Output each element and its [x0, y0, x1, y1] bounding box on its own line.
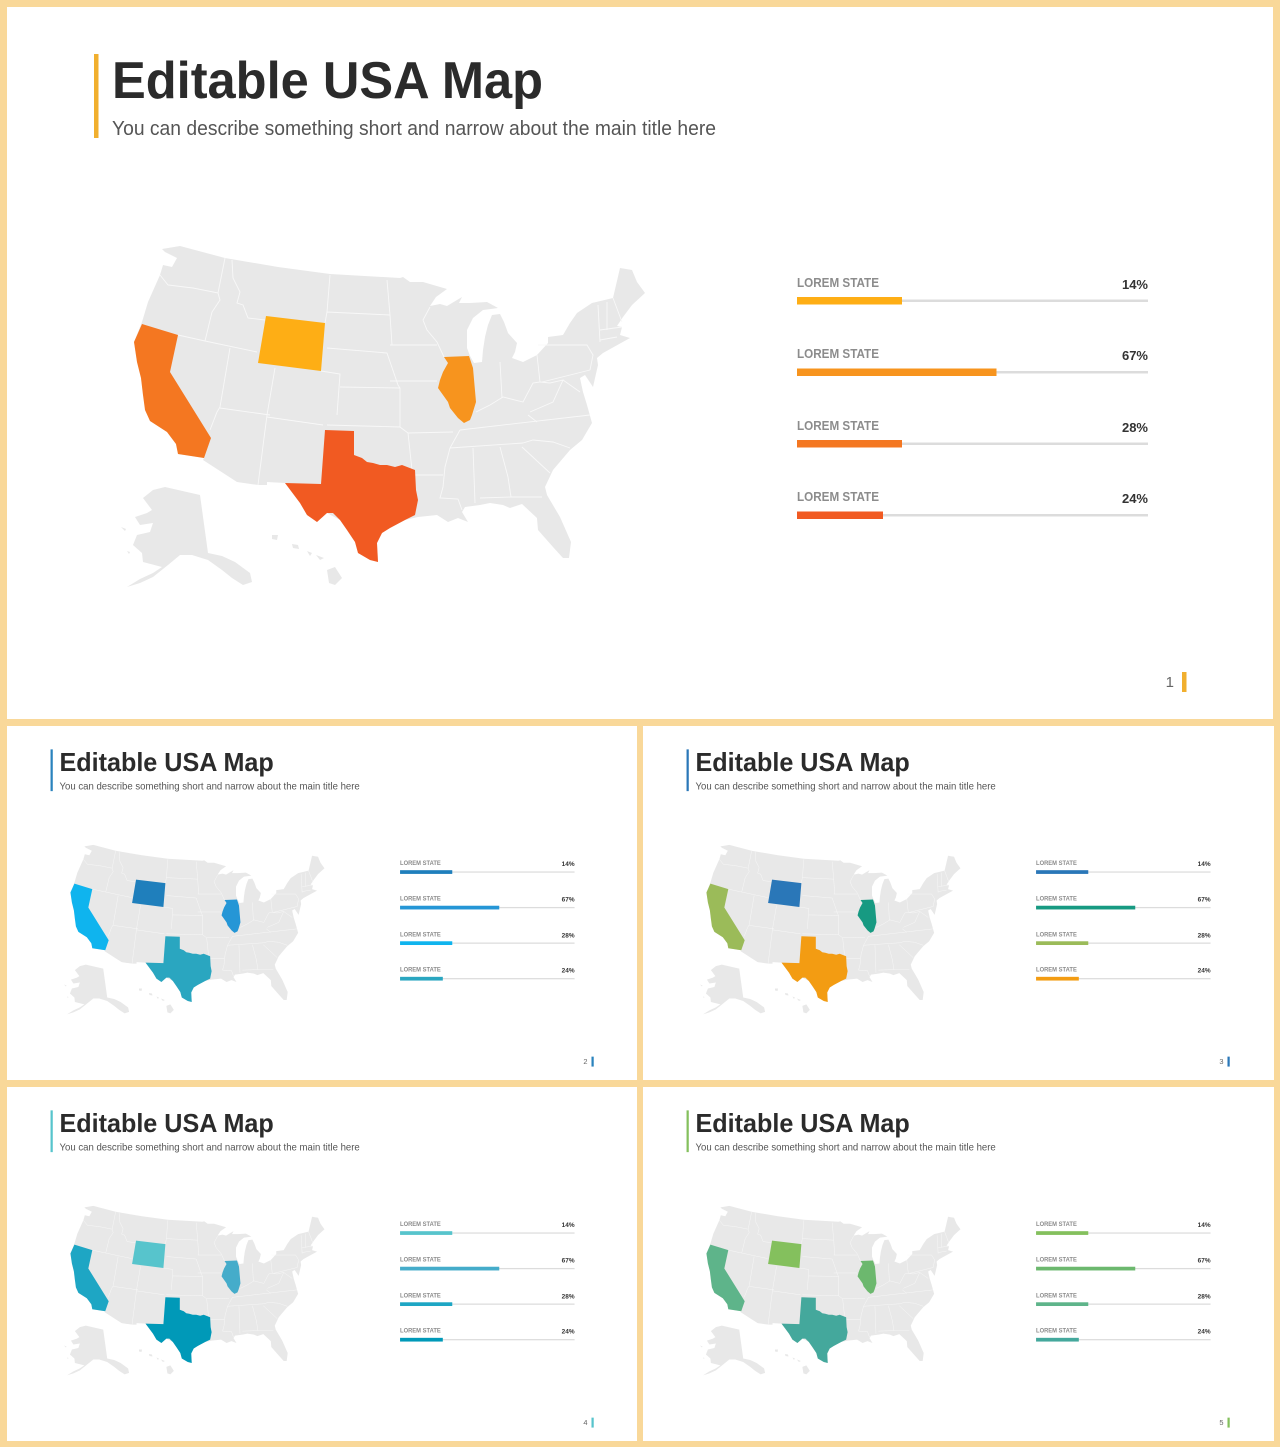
- subtitle: You can describe something short and narrow about the main title here: [695, 782, 996, 793]
- panel: slide 3 (multicolor theme): [643, 726, 1274, 1080]
- bar chart: [1036, 860, 1211, 981]
- bar chart: [400, 860, 575, 981]
- title accent bar: [51, 1110, 53, 1152]
- panel: slide 5 (green theme): [643, 1087, 1274, 1441]
- bar chart: LOREM STATE: [1036, 896, 1077, 903]
- subtitle: You can describe something short and narrow about the main title here: [695, 1143, 996, 1154]
- bar chart: 14%: [1198, 1222, 1211, 1229]
- bar chart: LOREM STATE: [1036, 860, 1077, 867]
- bar chart: LOREM STATE: [1036, 967, 1077, 974]
- title accent bar: [94, 54, 98, 138]
- page number: [1166, 672, 1186, 692]
- title: Editable USA Map: [695, 749, 910, 777]
- bar chart: 24%: [1198, 1329, 1211, 1336]
- bar chart: 67%: [1122, 348, 1148, 363]
- bar chart: 14%: [562, 1222, 575, 1229]
- bar chart: LOREM STATE: [797, 418, 879, 433]
- page number: [1219, 1418, 1230, 1428]
- subtitle: You can describe something short and narrow about the main title here: [59, 782, 360, 793]
- page number: 3: [1219, 1057, 1224, 1066]
- bar chart: 24%: [1198, 968, 1211, 975]
- bar chart: 67%: [562, 1258, 575, 1265]
- page number: 4: [583, 1418, 588, 1427]
- bar chart: [1036, 1221, 1211, 1342]
- bar chart: 14%: [562, 861, 575, 868]
- bar chart: 28%: [1122, 420, 1148, 435]
- bar chart: 28%: [1198, 932, 1211, 939]
- title: Editable USA Map: [59, 749, 274, 777]
- bar chart: [797, 275, 1148, 519]
- bar chart: [400, 1221, 575, 1342]
- bar chart: LOREM STATE: [1036, 1221, 1077, 1228]
- bar chart: 14%: [1122, 277, 1148, 292]
- bar chart: LOREM STATE: [797, 489, 879, 504]
- subtitle: You can describe something short and narrow about the main title here: [59, 1143, 360, 1154]
- page number: 1: [1166, 674, 1174, 691]
- USA map: [700, 845, 960, 1014]
- bar chart: 67%: [562, 897, 575, 904]
- bar chart: LOREM STATE: [400, 1292, 441, 1299]
- bar chart: 24%: [562, 1329, 575, 1336]
- bar chart: LOREM STATE: [400, 967, 441, 974]
- bar chart: 67%: [1198, 1258, 1211, 1265]
- page number: [583, 1057, 594, 1067]
- panel: slide 4 (teal theme): [7, 1087, 637, 1441]
- bar chart: LOREM STATE: [797, 346, 879, 361]
- USA map: [64, 1206, 324, 1375]
- title: Editable USA Map: [59, 1110, 274, 1138]
- title accent bar: [51, 749, 53, 791]
- bar chart: LOREM STATE: [400, 1221, 441, 1228]
- bar chart: LOREM STATE: [400, 931, 441, 938]
- USA map: [64, 845, 324, 1014]
- title: Editable USA Map: [695, 1110, 910, 1138]
- page number: [1219, 1057, 1230, 1067]
- bar chart: 24%: [1122, 491, 1148, 506]
- bar chart: LOREM STATE: [1036, 1328, 1077, 1335]
- USA map: [121, 246, 645, 587]
- panel: main slide (orange theme): [7, 7, 1273, 719]
- page number: 2: [583, 1057, 588, 1066]
- bar chart: 28%: [562, 1293, 575, 1300]
- title: Editable USA Map: [112, 52, 543, 110]
- bar chart: LOREM STATE: [400, 1328, 441, 1335]
- bar chart: LOREM STATE: [1036, 931, 1077, 938]
- bar chart: 14%: [1198, 861, 1211, 868]
- subtitle: You can describe something short and narrow about the main title here: [112, 118, 716, 140]
- title accent bar: [687, 749, 689, 791]
- bar chart: 67%: [1198, 897, 1211, 904]
- bar chart: 28%: [562, 932, 575, 939]
- title accent bar: [687, 1110, 689, 1152]
- bar chart: LOREM STATE: [400, 896, 441, 903]
- bar chart: LOREM STATE: [1036, 1292, 1077, 1299]
- USA map: [700, 1206, 960, 1375]
- page number: [583, 1418, 594, 1428]
- bar chart: LOREM STATE: [400, 860, 441, 867]
- bar chart: 28%: [1198, 1293, 1211, 1300]
- bar chart: 24%: [562, 968, 575, 975]
- panel: slide 2 (blue theme): [7, 726, 637, 1080]
- bar chart: LOREM STATE: [1036, 1257, 1077, 1264]
- page number: 5: [1219, 1418, 1224, 1427]
- bar chart: LOREM STATE: [400, 1257, 441, 1264]
- bar chart: LOREM STATE: [797, 275, 879, 290]
